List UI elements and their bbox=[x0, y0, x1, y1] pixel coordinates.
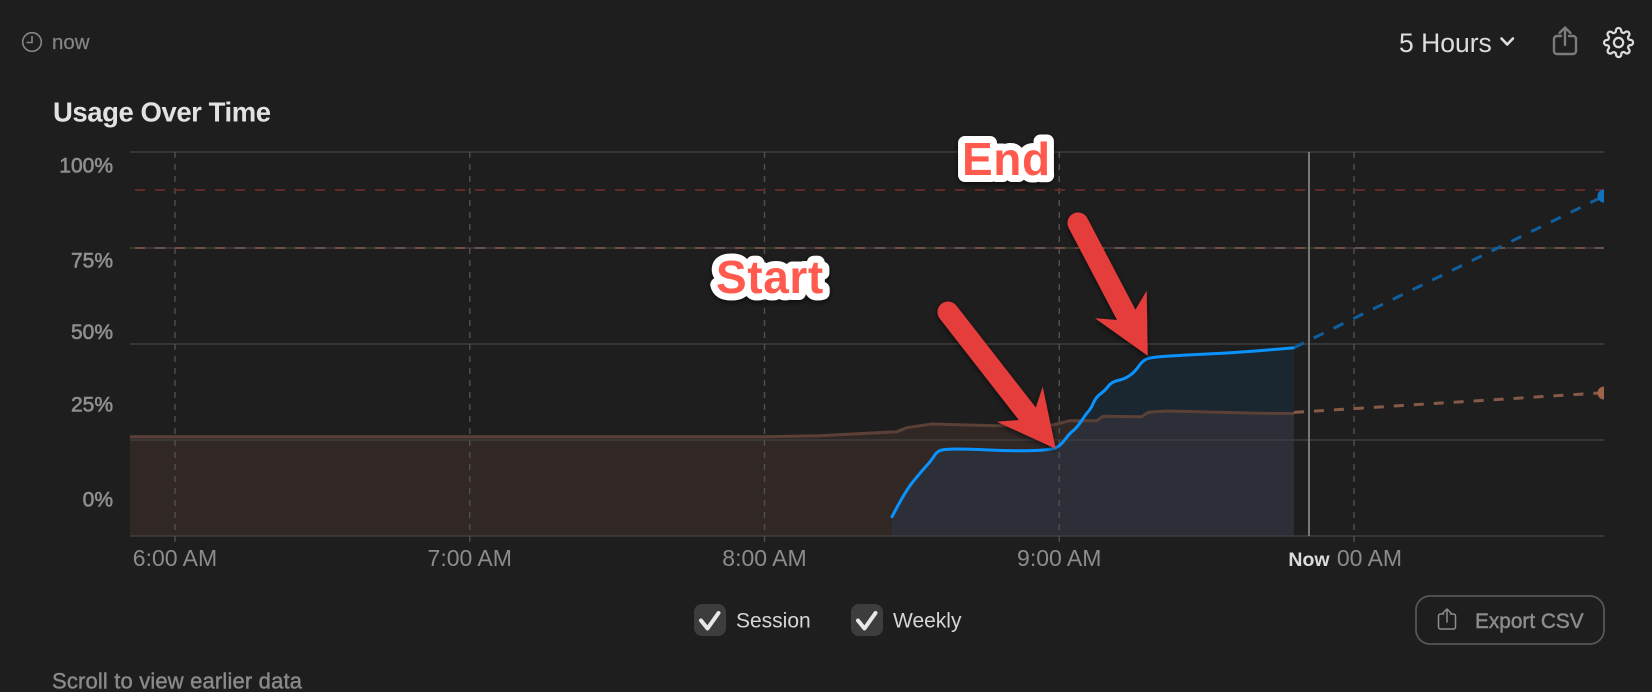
checkbox: Session: Session bbox=[736, 610, 811, 632]
heading: Usage Over Time bbox=[53, 97, 271, 128]
x axis labels: 6:00 AM bbox=[133, 545, 217, 571]
y axis labels: 75% bbox=[71, 250, 113, 272]
checkbox: Weekly bbox=[851, 604, 962, 636]
y axis labels: 25% bbox=[71, 394, 113, 416]
y axis labels bbox=[59, 154, 113, 512]
line: session bbox=[892, 348, 1294, 517]
x axis labels bbox=[133, 545, 1402, 571]
chart: usage over time bbox=[130, 152, 1610, 542]
checkbox: Weekly: Weekly bbox=[893, 610, 962, 632]
dot: weekly projection end bbox=[1598, 386, 1604, 400]
dot: session projection end bbox=[1598, 190, 1604, 202]
range selector: 5 Hours: 5 Hours bbox=[1399, 28, 1492, 58]
y axis labels: 0% bbox=[83, 488, 113, 512]
x axis labels: 7:00 AM bbox=[428, 545, 512, 571]
limit line: 75 percent bbox=[135, 247, 1604, 249]
icon: gear bbox=[1604, 28, 1633, 57]
projection: weekly bbox=[1294, 393, 1604, 412]
annotation: Start label: Start bbox=[716, 251, 824, 303]
y axis labels: 100% bbox=[59, 154, 113, 178]
area: session usage bbox=[892, 348, 1294, 536]
x axis labels: 9:00 AM bbox=[1017, 545, 1101, 571]
x axis labels: 8:00 AM bbox=[722, 545, 807, 571]
projection: session bbox=[1294, 196, 1604, 348]
x axis labels: Now bbox=[1288, 549, 1330, 571]
arrow: Start bbox=[948, 312, 1056, 449]
button: Export CSV bbox=[1416, 596, 1604, 644]
now marker bbox=[1308, 152, 1310, 536]
limit line: 90 percent bbox=[135, 189, 1604, 191]
area: weekly usage bbox=[130, 411, 1294, 536]
checkbox: Session bbox=[694, 604, 811, 636]
annotation: End label: End bbox=[962, 133, 1051, 185]
icon: clock bbox=[23, 33, 41, 51]
line: weekly bbox=[130, 411, 1294, 437]
arrow: End bbox=[1078, 223, 1148, 356]
timestamp: now: now bbox=[52, 31, 90, 54]
x axis labels: 00 AM bbox=[1337, 545, 1402, 571]
icon: share bbox=[1554, 28, 1576, 54]
y axis labels: 50% bbox=[71, 321, 113, 344]
button: Export CSV: Export CSV bbox=[1475, 610, 1584, 633]
